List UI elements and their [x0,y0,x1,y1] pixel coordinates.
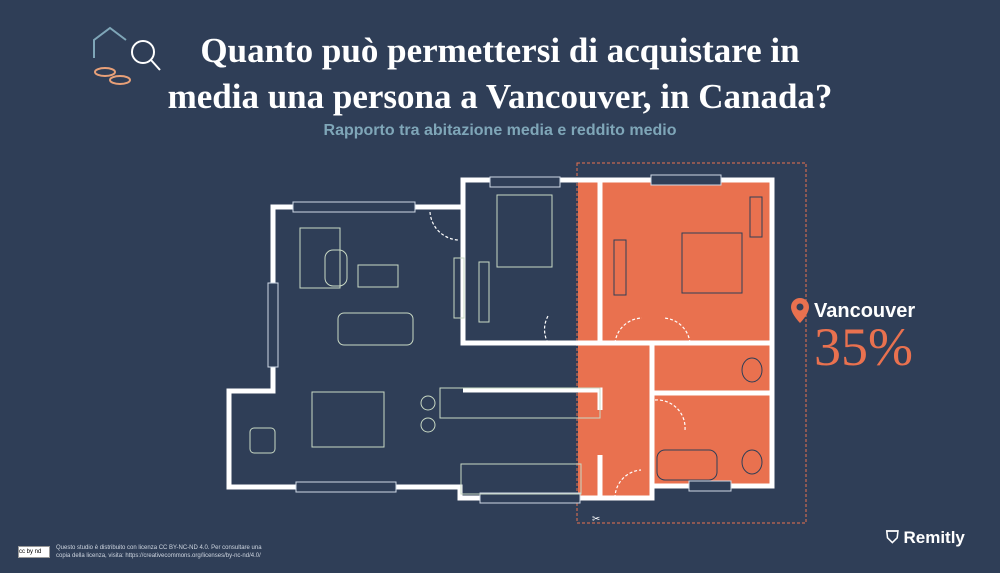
dashed highlight frame [577,163,806,523]
furniture outlines [250,195,762,494]
subtitle: Rapporto tra abitazione media e reddito medio [324,122,676,139]
doors [430,212,690,498]
license note [18,544,262,559]
icon: location pin [791,298,809,323]
windows [268,175,731,503]
title: media una persona a Vancouver, in Canada? [168,77,832,116]
license note: copia della licenza, visita: https://creativecommons.org/licenses/by-nc-nd/4.0/ [56,553,261,559]
title [168,31,832,116]
orange highlighted area [578,180,772,498]
value: 35%: 35% [814,317,913,377]
label: Vancouver: Vancouver [814,300,915,322]
icon: house with magnifier [94,28,160,84]
license note: Questo studio è distribuito con licenza CC BY-NC-ND 4.0. Per consultare una [56,545,262,551]
title: Quanto può permettersi di acquistare in [200,31,800,70]
icon: scissors: ✂ [592,514,600,525]
walls [229,180,772,498]
license note: cc by nd [19,549,41,555]
logo: Remitly: ⛉ Remitly [886,528,965,547]
